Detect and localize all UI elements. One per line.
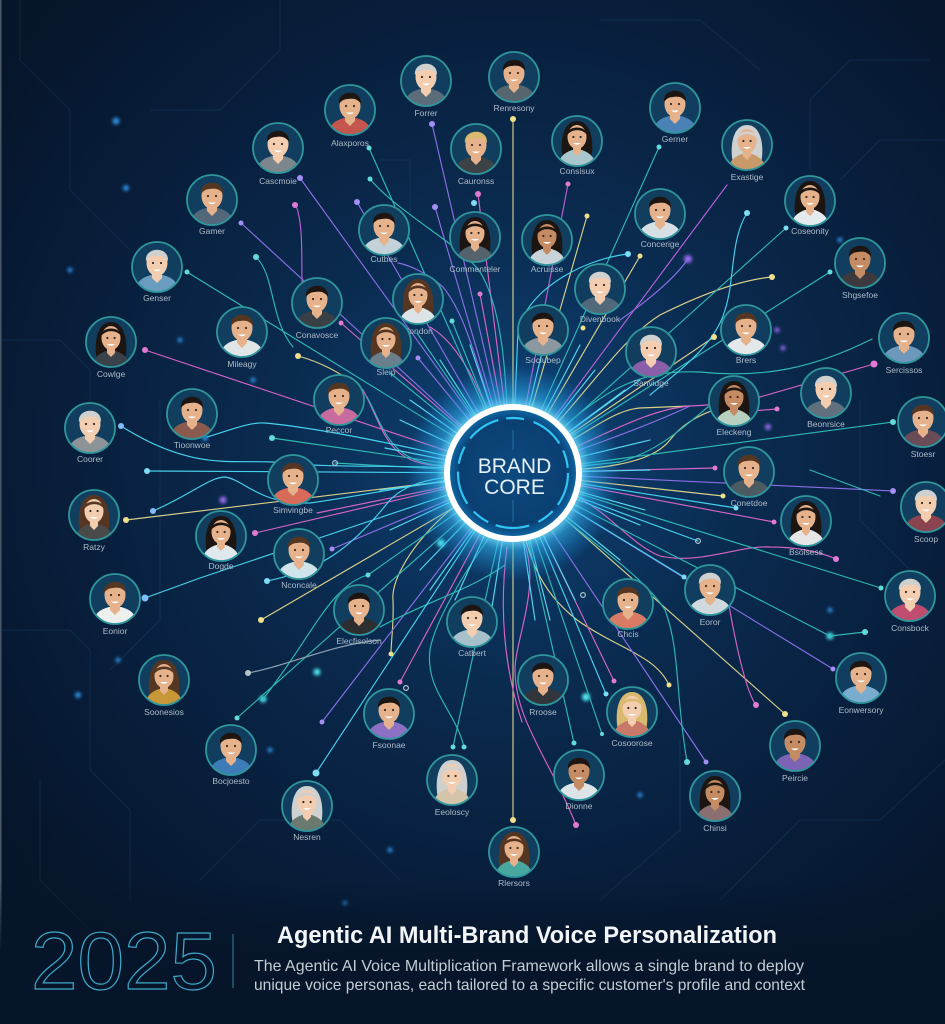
persona: Cutbes: Cutbes: [371, 254, 397, 264]
persona: Stoesr: Stoesr: [911, 449, 935, 459]
persona: Coorer: [65, 403, 115, 464]
persona: Shgsefoe: Shgsefoe: [842, 290, 878, 300]
persona: Cosoorose: Cosoorose: [611, 738, 653, 748]
persona: Nesren: [282, 781, 332, 842]
persona: Conetdoe: [724, 447, 774, 508]
persona: Nconcale: Nconcale: [281, 580, 317, 590]
persona: Dionne: Dionne: [566, 801, 593, 811]
persona: Consbock: Consbock: [891, 623, 930, 633]
persona: Ratzy: [69, 490, 119, 552]
persona: Rlersors: Rlersors: [498, 878, 530, 888]
persona: Consisux: [552, 116, 602, 176]
persona: Concerige: Concerige: [641, 239, 680, 249]
persona: Bocjoesto: Bocjoesto: [212, 776, 250, 786]
persona: Cauronss: [451, 124, 501, 186]
persona: Catbert: Catbert: [458, 648, 487, 658]
persona: Cascmoie: Cascmoie: [259, 176, 297, 186]
persona: Mileagy: Mileagy: [227, 359, 257, 369]
persona: Condon: [393, 274, 443, 336]
persona: Peircie: Peircie: [782, 773, 808, 783]
persona: Rroose: Rroose: [529, 707, 557, 717]
persona: Simvingbe: [268, 455, 318, 515]
persona: Nconcale: [274, 529, 324, 590]
persona: Tioonwoe: Tioonwoe: [174, 440, 211, 450]
persona: Chinsi: [690, 771, 740, 833]
brand core: [405, 365, 621, 581]
description: The Agentic AI Voice Multiplication Framework allows a single brand to deploy: [254, 958, 804, 975]
persona: Exastige: Exastige: [731, 172, 764, 182]
persona avatars: [65, 52, 945, 888]
persona: Cowlge: [86, 317, 136, 379]
persona: Sanvidge: [626, 327, 676, 388]
persona: Cutbes: [359, 205, 409, 264]
persona: Acruisse: [522, 215, 572, 274]
persona: Eonior: Eonior: [103, 626, 127, 636]
persona: Nesren: Nesren: [293, 832, 321, 842]
persona: Bsolsess: Bsolsess: [789, 547, 823, 557]
persona: Concerige: [635, 189, 685, 249]
persona: Sleip: [361, 318, 411, 377]
persona: Eoror: [685, 565, 735, 627]
persona: Commenteler: Commenteler: [449, 264, 501, 274]
persona: Sercissos: [879, 313, 929, 375]
persona: Divenbook: Divenbook: [580, 314, 621, 324]
persona: Fsoonae: [364, 689, 414, 750]
persona: Brers: [721, 305, 771, 365]
persona: Gerner: [650, 83, 700, 144]
persona: Genser: Genser: [143, 293, 171, 303]
persona: Cowlge: Cowlge: [97, 369, 125, 379]
persona: Brers: Brers: [736, 355, 756, 365]
persona: Beonrsice: [801, 368, 851, 429]
persona: Eonwersory: [836, 653, 886, 715]
persona: Alaxporos: [325, 85, 375, 148]
description: [254, 958, 806, 994]
persona: Conavosce: Conavosce: [296, 330, 339, 340]
endpoint dots: [118, 116, 896, 828]
persona: Alaxporos: Alaxporos: [331, 138, 369, 148]
persona: Elecfisolson: Elecfisolson: [336, 636, 382, 646]
persona: Sercissos: Sercissos: [886, 365, 922, 375]
persona: Sleip: Sleip: [377, 367, 396, 377]
persona: Coseonity: [785, 176, 835, 236]
persona: Commenteler: [449, 212, 501, 274]
year 2025: 2025: [31, 916, 217, 1007]
persona: Conavosce: [292, 278, 342, 340]
persona: Divenbook: [575, 264, 625, 324]
persona: Cascmoie: [253, 123, 303, 186]
persona: Peccor: Peccor: [326, 425, 352, 435]
persona: Shgsefoe: [835, 238, 885, 300]
persona: Consisux: Consisux: [560, 166, 595, 176]
persona: Stoesr: [898, 397, 945, 459]
persona: Chcis: [603, 579, 653, 639]
persona: Ratzy: Ratzy: [83, 542, 106, 552]
persona: Renresony: [489, 52, 539, 113]
persona: Simvingbe: Simvingbe: [273, 505, 313, 515]
persona: Elecfisolson: [334, 585, 384, 646]
persona: Gamer: [187, 175, 237, 236]
connection lines: [121, 119, 893, 825]
persona: Cauronss: Cauronss: [458, 176, 494, 186]
persona: Chcis: Chcis: [617, 629, 639, 639]
persona: Forrer: Forrer: [414, 108, 438, 118]
persona: Forrer: [401, 56, 451, 118]
persona: Fsoonae: Fsoonae: [372, 740, 406, 750]
core label: CORE: [484, 476, 545, 499]
short rays near core: [380, 340, 650, 620]
persona: Soonesios: [139, 655, 189, 717]
persona: Dionne: [554, 750, 604, 811]
persona: Eleckeng: Eleckeng: [717, 427, 752, 437]
persona: Gerner: Gerner: [662, 134, 688, 144]
description: unique voice personas, each tailored to a specific customer's profile and context: [254, 977, 806, 994]
divider: [232, 934, 234, 988]
persona: Beonrsice: Beonrsice: [807, 419, 845, 429]
persona: Conetdoe: Conetdoe: [731, 498, 768, 508]
persona: Eleckeng: [709, 376, 759, 437]
persona: Scoop: [901, 482, 945, 544]
persona: Mileagy: [217, 307, 267, 369]
persona: Soclubep: Soclubep: [525, 355, 561, 365]
persona: Eeoloscy: Eeoloscy: [435, 807, 470, 817]
persona: Condon: Condon: [403, 326, 433, 336]
persona: Tioonwoe: [167, 389, 217, 450]
persona: Peircie: [770, 721, 820, 783]
persona: Chinsi: Chinsi: [703, 823, 727, 833]
persona: Eonior: [90, 574, 140, 636]
persona: Peccor: [314, 375, 364, 435]
persona: Dogde: Dogde: [208, 561, 234, 571]
persona: Soclubep: [518, 305, 568, 365]
persona: Eonwersory: Eonwersory: [839, 705, 884, 715]
persona: Genser: [132, 242, 182, 303]
persona: Rroose: [518, 655, 568, 717]
persona: Coseonity: Coseonity: [791, 226, 830, 236]
ambient glow particles: [68, 118, 842, 906]
persona: Coorer: Coorer: [77, 454, 103, 464]
persona: Consbock: [885, 571, 935, 633]
persona: Exastige: [722, 120, 772, 182]
persona: Catbert: [447, 597, 497, 658]
persona: Rlersors: [489, 827, 539, 888]
persona: Scoop: Scoop: [914, 534, 938, 544]
persona: Eeoloscy: [427, 755, 477, 817]
persona: Dogde: [196, 511, 246, 571]
persona: Soonesios: Soonesios: [144, 707, 184, 717]
persona: Sanvidge: Sanvidge: [633, 378, 669, 388]
persona: Renresony: Renresony: [493, 103, 535, 113]
persona: Bsolsess: [781, 496, 831, 557]
core label: BRAND: [478, 455, 551, 478]
title: Agentic AI Multi-Brand Voice Personalization: [277, 922, 777, 949]
persona: Gamer: Gamer: [199, 226, 225, 236]
persona: Bocjoesto: [206, 725, 256, 786]
persona: Cosoorose: [607, 687, 657, 748]
persona: Eoror: Eoror: [700, 617, 721, 627]
persona: Acruisse: Acruisse: [531, 264, 564, 274]
